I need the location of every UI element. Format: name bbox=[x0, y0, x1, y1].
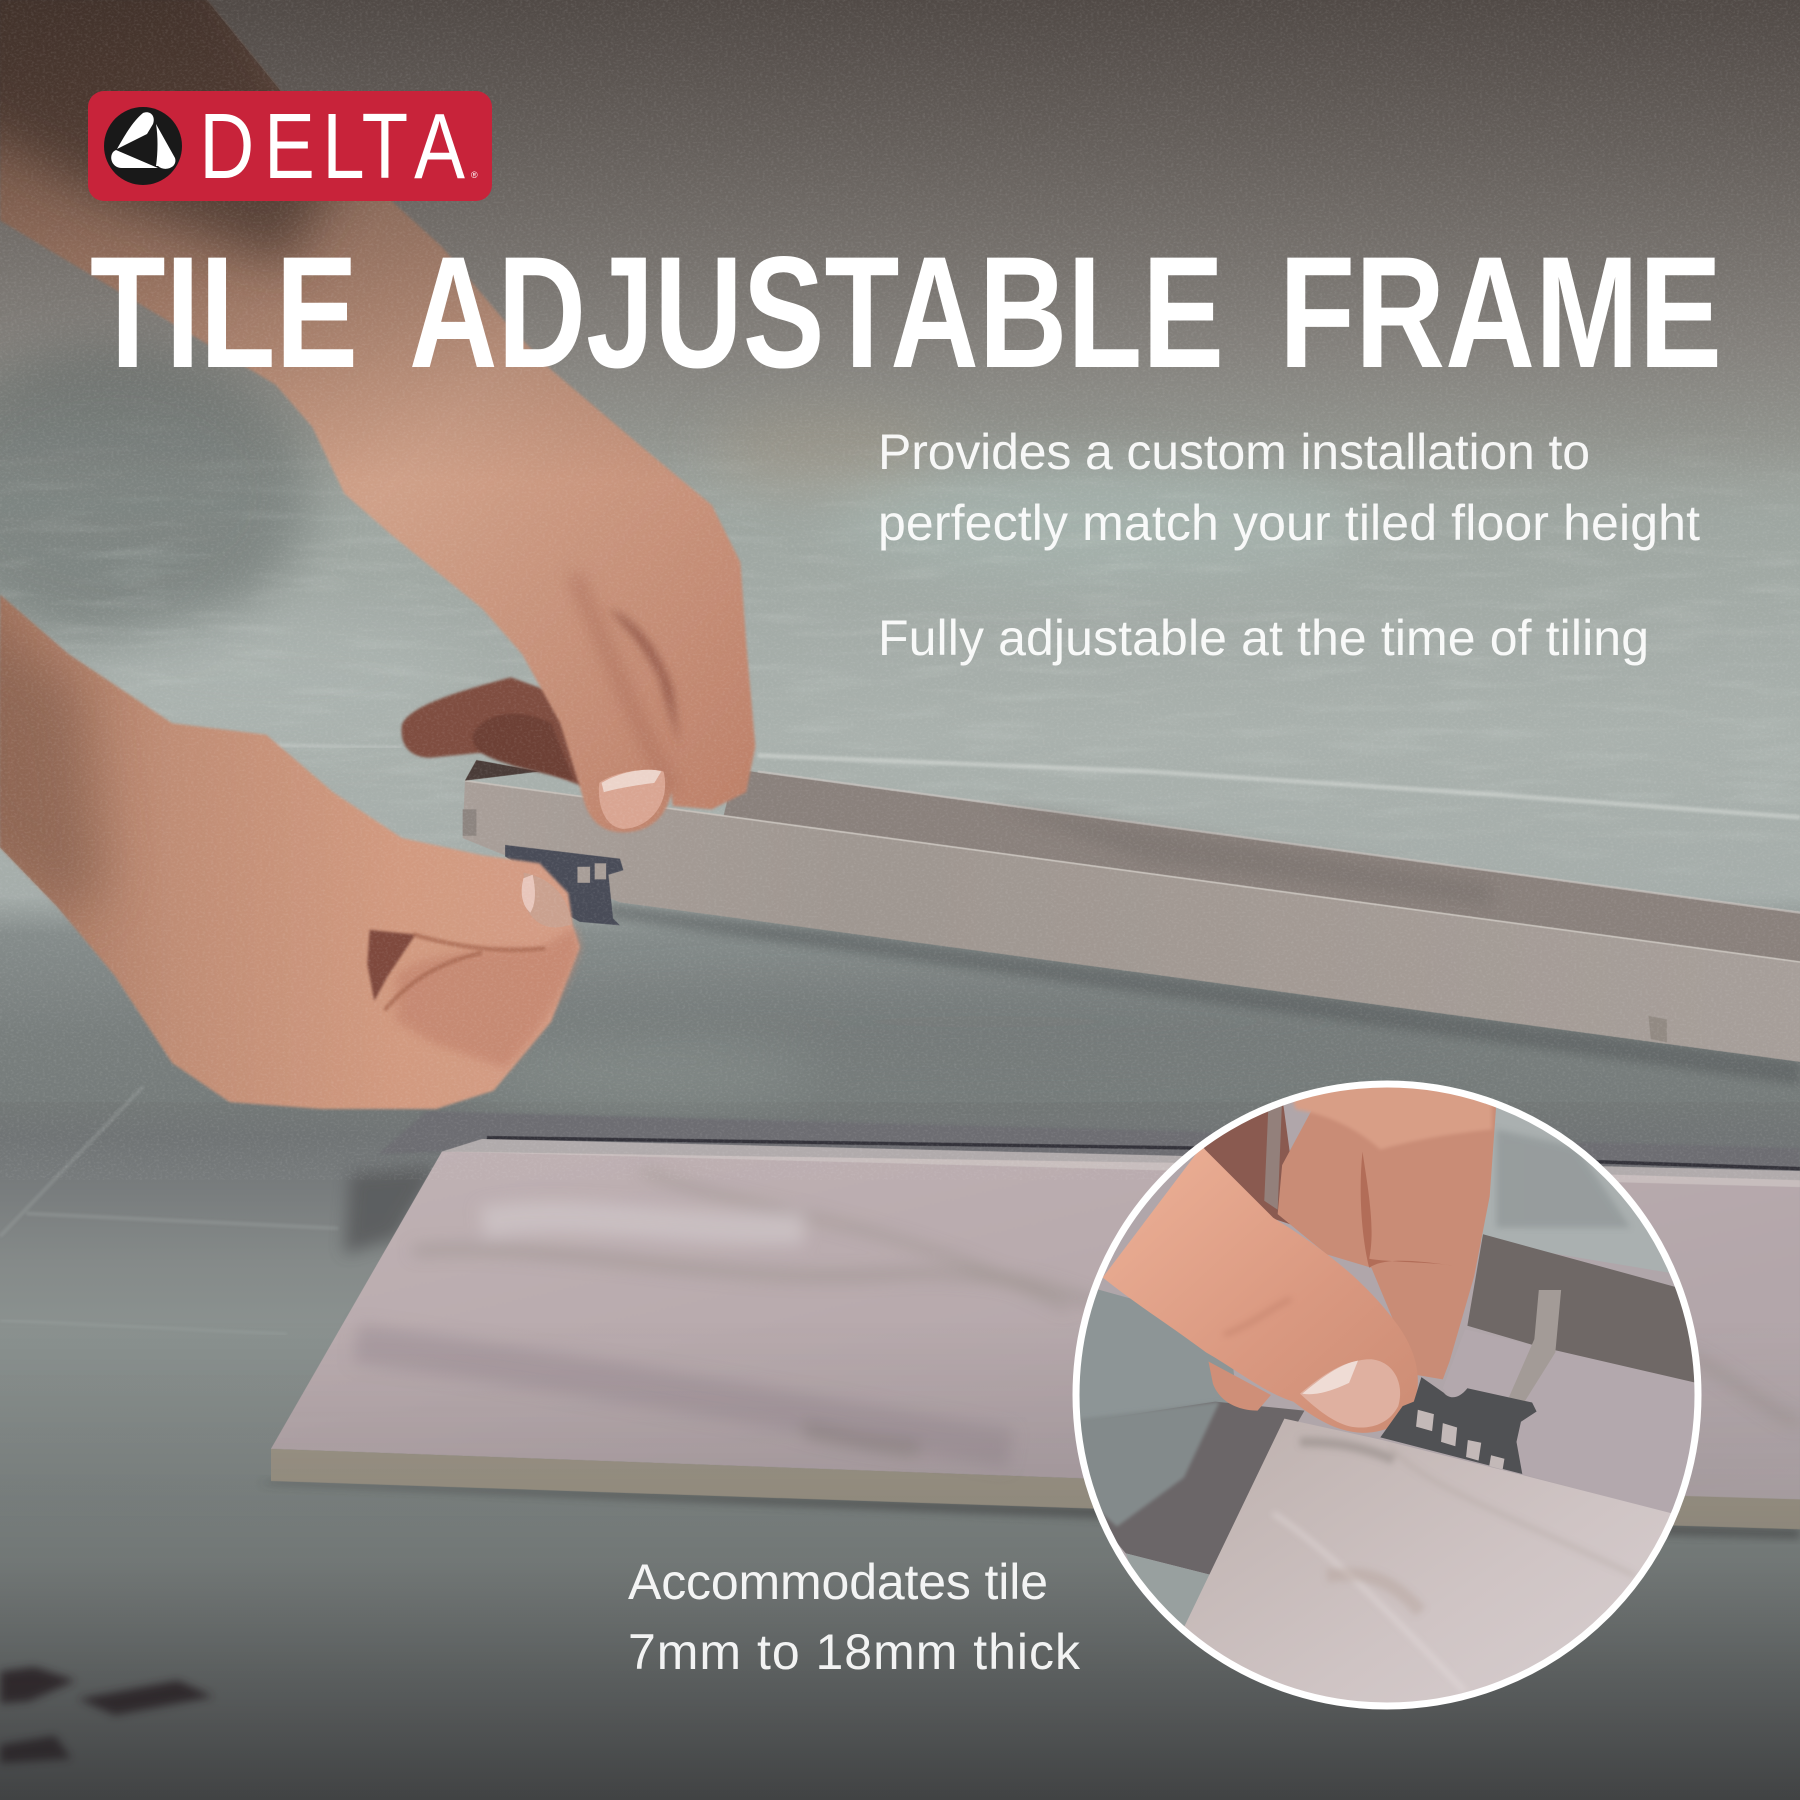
grout strip behind tile bbox=[379, 1111, 1800, 1182]
text block: custom installation: perfectly match your tiled floor height bbox=[878, 495, 1700, 551]
floor bbox=[0, 1102, 1800, 1800]
plaster grain bbox=[0, 0, 1800, 1180]
icon: Delta triangle mark bbox=[104, 107, 182, 185]
wall bbox=[0, 0, 1800, 1182]
title: ADJUSTABLE bbox=[409, 223, 1224, 401]
inset rod bbox=[1509, 1290, 1561, 1404]
text block: tile thickness bbox=[628, 1554, 1081, 1680]
inset small finger bbox=[1208, 1361, 1271, 1411]
inset wall plaster bbox=[1481, 1108, 1668, 1272]
marble veins bbox=[356, 1171, 1800, 1449]
wordmark: DELTA bbox=[199, 95, 465, 199]
registered mark: ® bbox=[471, 170, 478, 180]
inset metal frame bbox=[1468, 1234, 1694, 1382]
lower arm and hand bbox=[0, 595, 580, 1109]
inset spacer clip bbox=[1380, 1377, 1537, 1474]
inset big tile bbox=[1184, 1419, 1729, 1781]
bar back face bbox=[723, 769, 1800, 962]
small spacers on floor bbox=[0, 1667, 214, 1763]
inset white ring bbox=[1076, 1084, 1698, 1706]
marble tile bbox=[271, 1151, 1800, 1504]
text block: tile thickness: Accommodates tile bbox=[628, 1554, 1048, 1610]
lower thumb nail bbox=[523, 872, 572, 927]
text block: custom installation bbox=[878, 424, 1700, 551]
plaster ledge lines bbox=[758, 755, 1800, 817]
inset floor of frame bbox=[1556, 1350, 1694, 1383]
title bbox=[90, 223, 1722, 401]
arm hair shading bbox=[0, 0, 344, 264]
thumb nail upper bbox=[599, 770, 665, 829]
text block: tile thickness: 7mm to 18mm thick bbox=[628, 1624, 1081, 1680]
bar shadow bbox=[608, 901, 1800, 1085]
knuckle shading bbox=[608, 608, 680, 746]
inset left plaster bbox=[1068, 1281, 1237, 1428]
light falloff at the bottom bbox=[0, 1320, 1800, 1800]
bar front face bbox=[463, 781, 1800, 1062]
light falloff at the top bbox=[0, 0, 1800, 482]
upper arm and hand bbox=[0, 0, 755, 832]
text block: custom installation: Provides a custom installation to bbox=[878, 424, 1590, 480]
inset middle finger bbox=[1278, 1080, 1496, 1379]
plaster streak texture bbox=[6, 516, 1092, 774]
title: TILE bbox=[90, 223, 358, 401]
inset thumbnail bbox=[1300, 1359, 1400, 1428]
text block: adjustable: Fully adjustable at the time of tiling bbox=[878, 610, 1649, 666]
inset circle: close-up of spacer clip bbox=[1068, 1076, 1729, 1781]
tile shadow bbox=[258, 1481, 1800, 1538]
inset dark finger behind bbox=[1202, 1096, 1300, 1228]
spacer clip on bar bbox=[505, 845, 623, 925]
badge background bbox=[88, 91, 492, 201]
back fingers of upper hand bbox=[402, 677, 597, 792]
tile edge bbox=[271, 1449, 1800, 1529]
Delta logo badge bbox=[88, 91, 492, 201]
finger gap shading bbox=[367, 930, 416, 1001]
inset thumb bbox=[1103, 1146, 1418, 1433]
